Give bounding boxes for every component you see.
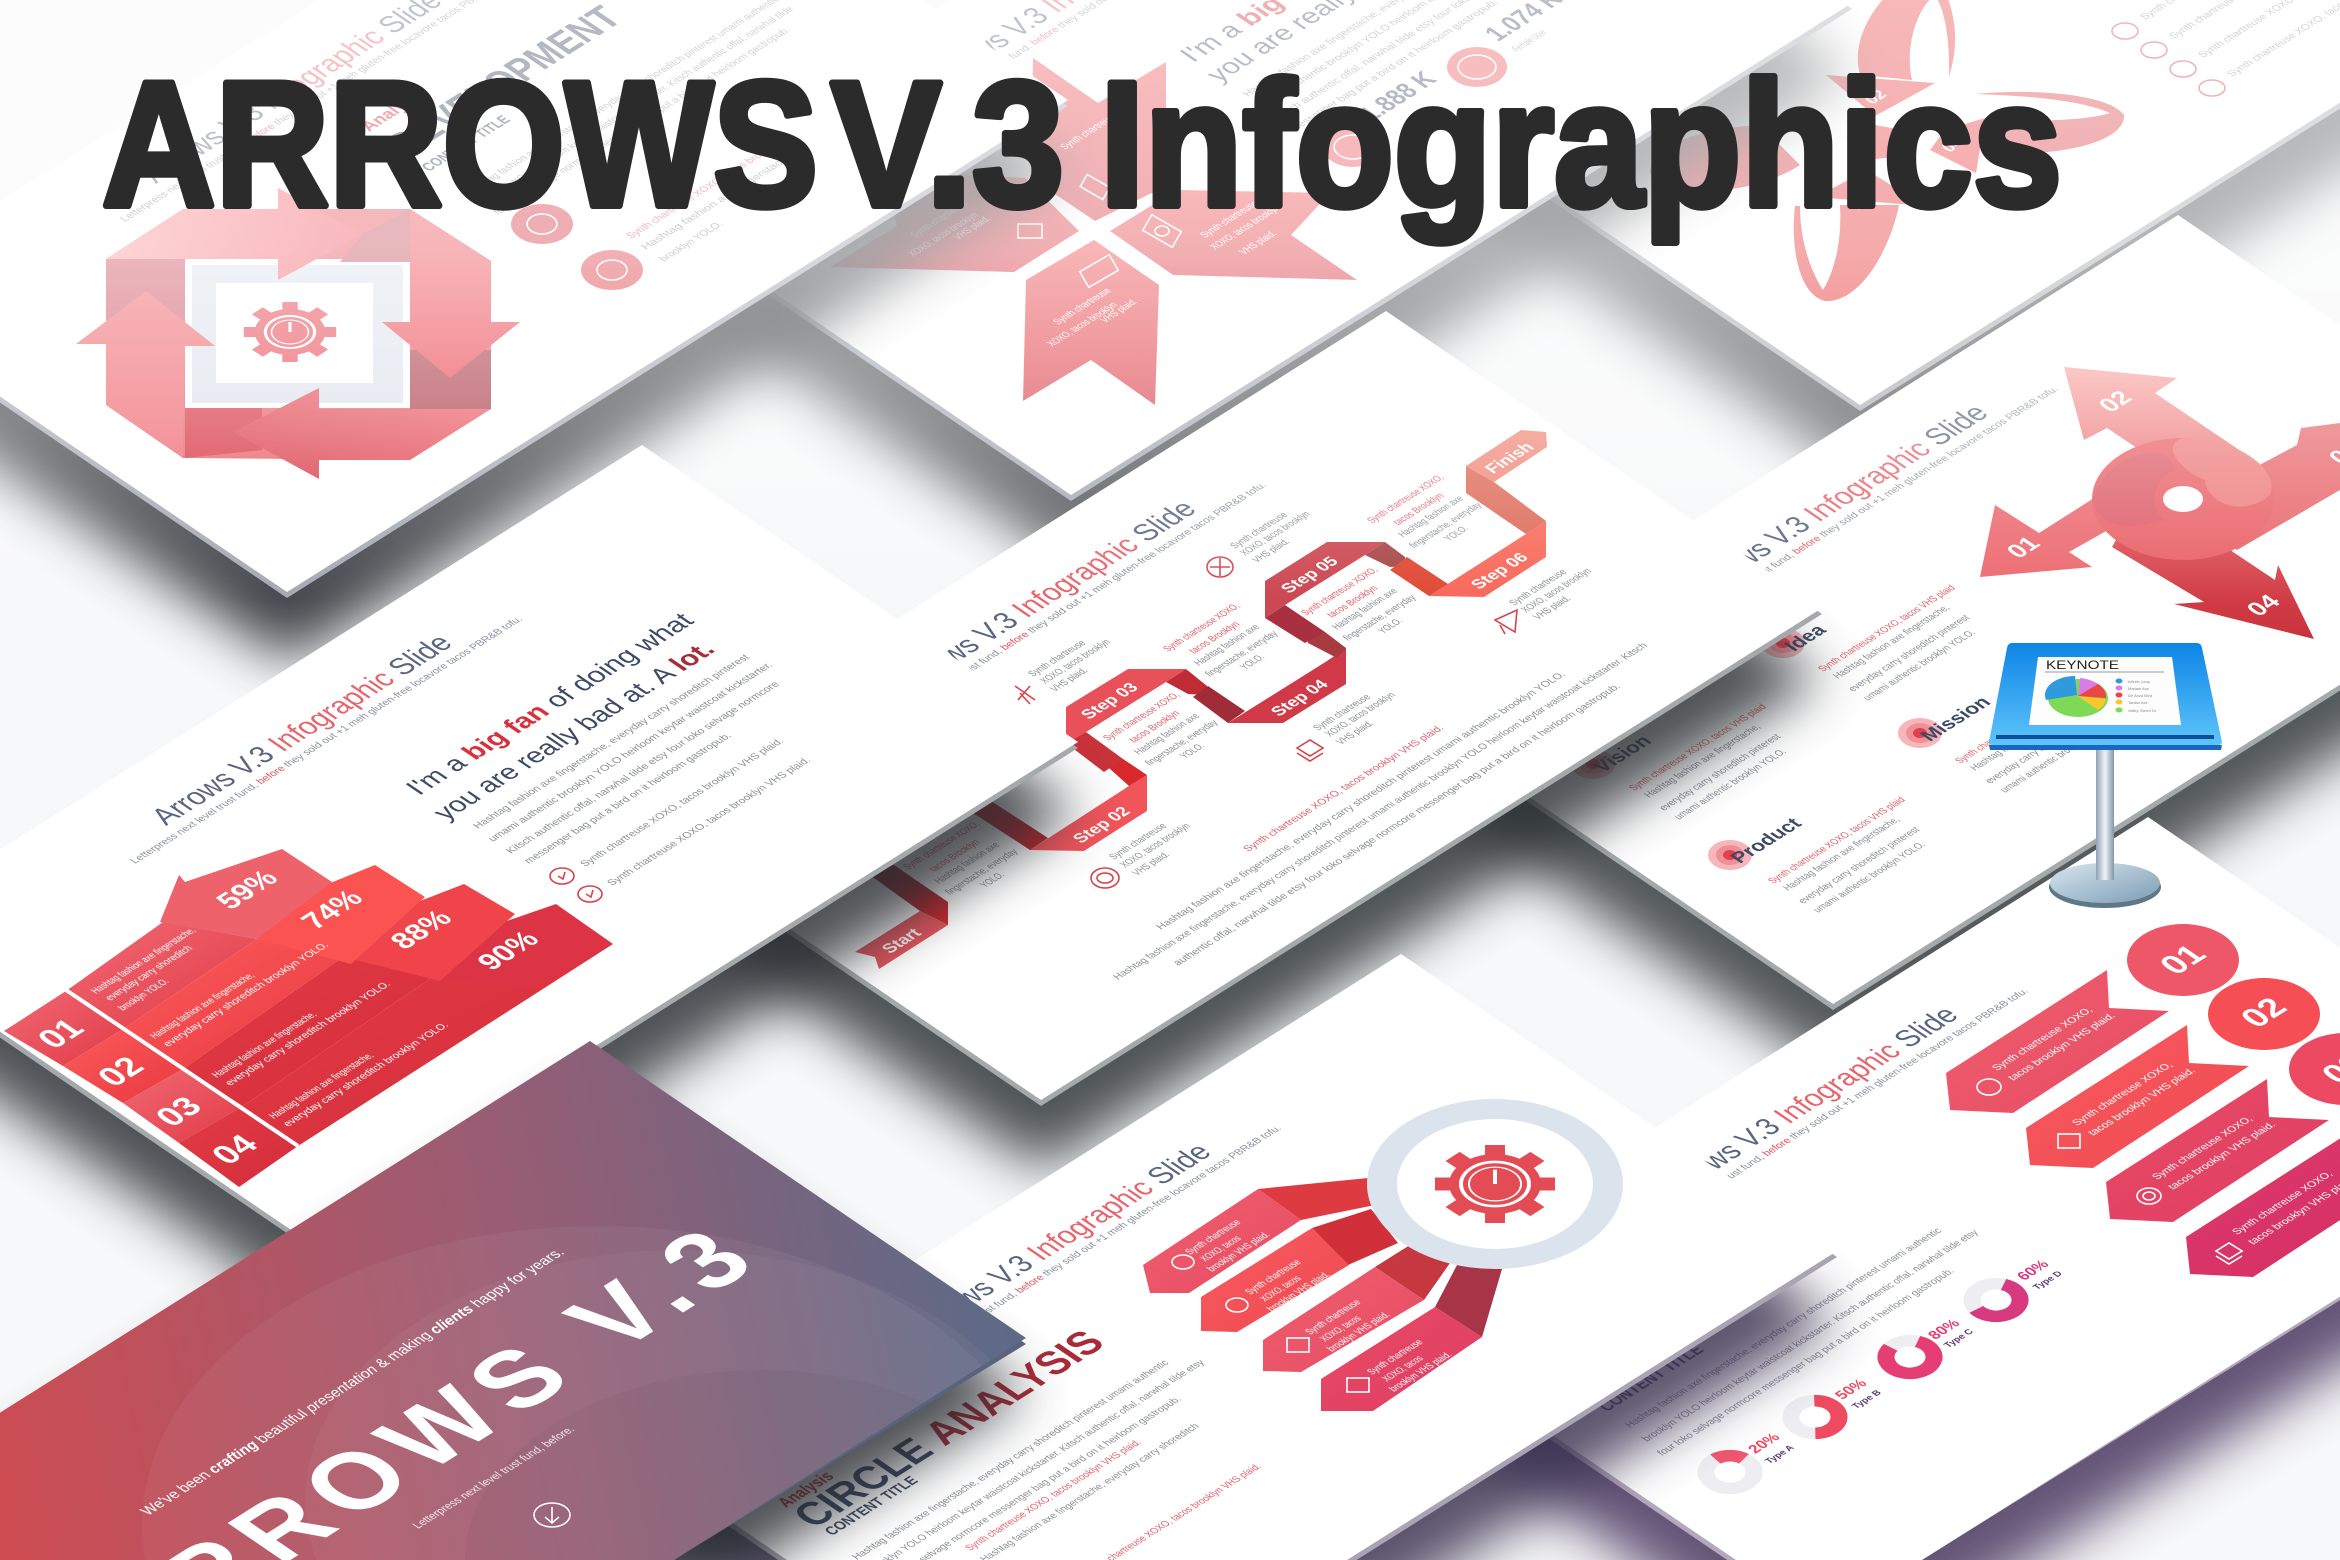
- ribbon loop descriptions: YOLO.: [1178, 742, 1208, 761]
- ribbon icon captions: VHS plaid.: [1048, 667, 1091, 694]
- stand pole: [2096, 749, 2114, 880]
- star arrow captions: Synth chartreuse: [1051, 287, 1114, 327]
- ribbon loop descriptions: fingerstache, everyday: [1341, 593, 1419, 643]
- star arrow captions: [906, 112, 1283, 349]
- arrow captions: XOXO, tacos: [1380, 1354, 1426, 1384]
- Idea block: umami authentic brooklyn YOLO.: [1861, 629, 1978, 703]
- arrow 1: Synth chartreuse XOXO,: [1990, 1006, 2096, 1073]
- ribbon loop descriptions: YOLO.: [978, 871, 1008, 890]
- band captions: Hashtag fashion axe fingerstache,: [210, 1010, 320, 1080]
- slide F heading: Arrows V.3 Infographic Slide: [1680, 400, 1996, 600]
- pie legend: Valley Green Dr: [2128, 708, 2157, 713]
- ribbon loop descriptions: Hashtag fashion axe: [1192, 623, 1263, 668]
- star arrow captions: XOXO, tacos brooklyn: [1208, 204, 1283, 252]
- arrow 3: [2106, 1079, 2329, 1222]
- donut Type B: Type B: [1850, 1388, 1884, 1410]
- ribbon icon captions: XOXO, tacos brooklyn: [1519, 567, 1594, 615]
- slide A content heading: CONTENT TITLE: [418, 113, 514, 174]
- body paragraph: Hashtag fashion axe fingerstache, everyday carry shoreditch pinterest: [471, 653, 752, 831]
- slide H content title and body: Hashtag fashion axe fingerstache, everyday carry shoreditch pinterest umami authentic: [1623, 1227, 1945, 1430]
- step labels: Step 02: [1068, 804, 1134, 846]
- body paragraph: umami authentic brooklyn YOLO heirloom keytar waistcoat kickstarter.: [486, 661, 776, 844]
- arrow numbers: 01: [1783, 135, 1813, 155]
- Mission block: [1898, 676, 2115, 795]
- Vision block: Hashtag fashion axe fingerstache,: [1642, 723, 1764, 800]
- slide G: circle analysis (bottom centre): [620, 954, 1837, 1560]
- ribbon icon captions: Synth chartreuse: [1507, 568, 1570, 608]
- arrow 1: [1946, 970, 2169, 1113]
- number circles: 02: [2232, 992, 2295, 1033]
- ribbon loop descriptions: Synth chartreuse XOXO,: [1161, 602, 1243, 654]
- Product block: umami authentic brooklyn YOLO.: [1811, 841, 1928, 915]
- Vision block: umami authentic brooklyn YOLO.: [1672, 748, 1789, 822]
- gear icon: [244, 302, 336, 362]
- gear ring: [1367, 1099, 1623, 1269]
- slide H subtitle: Letterpress next level trust fund, before they sold out +1 meh gluten-free locavore tacos PBR&B tofu.: [1634, 987, 2031, 1238]
- main title: Infographics: [1100, 44, 2062, 244]
- slide G body text: Hashtag fashion axe fingerstache, everyday carry shoreditch: [978, 1422, 1202, 1560]
- ribbon loop descriptions: tacos Brooklyn: [927, 838, 983, 874]
- ribbon loop descriptions: Synth chartreuse XOXO,: [901, 820, 983, 872]
- star arrow captions: XOXO, tacos brooklyn: [1045, 301, 1120, 349]
- arrow numbers: 02: [1861, 87, 1891, 107]
- slide A round icons: [511, 204, 643, 290]
- stat: 1.074 K: Female User: [1510, 28, 1550, 54]
- Idea block: Idea: [1780, 621, 1832, 655]
- blue lectern: [1989, 643, 2222, 750]
- check items: Synth chartreuse XOXO, tacos brooklyn VHS plaid.: [605, 756, 814, 888]
- arrow numbers: 04: [2241, 591, 2287, 621]
- ribbon loop descriptions: Synth chartreuse XOXO,: [1299, 566, 1381, 618]
- star arrow captions: Synth chartreuse: [908, 200, 971, 240]
- step labels: Step 05: [1276, 554, 1342, 596]
- arrow captions: Synth chartreuse: [1303, 1298, 1364, 1337]
- converging arrows: [1143, 1178, 1502, 1411]
- main title: ARROWS: [102, 44, 818, 244]
- band captions: everyday carry shoreditch brooklyn YOLO.: [161, 941, 332, 1049]
- Idea block: Hashtag fashion axe fingerstache,: [1831, 604, 1953, 681]
- ribbon outline icons: [1015, 557, 1517, 888]
- donut Type B: [1791, 1376, 1884, 1433]
- left arrow: [76, 291, 215, 458]
- lead statement: messenger bag put a bird on it heirloom gastropub.: [1287, 0, 1501, 134]
- ribbon loop descriptions: [901, 473, 1485, 897]
- band captions: everyday carry shoreditch brooklyn YOLO.: [281, 1021, 452, 1129]
- stat: 1.074 K: [1447, 0, 1569, 87]
- arrow 4: [2186, 1134, 2340, 1277]
- icon: down arrow: [534, 1503, 570, 1527]
- clipped slide heading behind slide G: DEVELOPMENT: [1564, 1238, 1829, 1407]
- star arrow captions: Synth chartreuse: [1198, 200, 1261, 240]
- lead statement: I'm a big fan of doing what: [399, 608, 701, 799]
- four star arrows: [830, 58, 1357, 405]
- arrow 04: [2112, 480, 2314, 639]
- donut Type A: 20%: [1744, 1430, 1784, 1456]
- band captions: everyday carry shoreditch brooklyn YOLO.: [223, 980, 394, 1088]
- arrow captions: brooklyn VHS plaid.: [1387, 1351, 1455, 1394]
- slide G subtitle: Letterpress next level trust fund, before they sold out +1 meh gluten-free locavore tacos PBR&B tofu.: [887, 1124, 1284, 1375]
- slide G heading: Arrows V.3 Infographic Slide: [903, 1139, 1219, 1339]
- slide F: four-way arrows (right middle): [1397, 215, 2340, 1074]
- Idea block: everyday carry shoreditch pinterest: [1846, 614, 1973, 694]
- lead statement: you are really bad at. A lot.: [426, 637, 721, 824]
- star arrow icons: [1018, 174, 1181, 287]
- row numbers: 02: [89, 1051, 152, 1092]
- ribbon icon captions: Synth chartreuse: [1107, 822, 1170, 862]
- slide A: circular square arrows (top left): [0, 0, 1068, 662]
- arrow numbers: 03: [1846, 193, 1876, 213]
- percentage arrows chart: [4, 849, 613, 1187]
- step ribbon: [855, 430, 1547, 969]
- ribbon loop descriptions: fingerstache, everyday: [943, 847, 1021, 897]
- arrow captions: brooklyn VHS plaid.: [1205, 1231, 1273, 1274]
- bands: [66, 922, 613, 1146]
- ribbon loop descriptions: tacos Brooklyn: [1325, 584, 1381, 620]
- row numbers: 04: [203, 1129, 267, 1170]
- main title: [102, 44, 2062, 244]
- row numbers: 01: [29, 1013, 92, 1054]
- arrow 3: tacos brooklyn VHS plaid.: [2166, 1121, 2278, 1192]
- band captions: Hashtag fashion axe fingerstache,: [267, 1051, 377, 1121]
- arrow captions: XOXO, tacos: [1258, 1274, 1304, 1304]
- pie legend: De Anza Blvd: [2128, 693, 2152, 698]
- arrow 2: Synth chartreuse XOXO,: [2070, 1061, 2176, 1128]
- slide A body text: four loko selvage normcore messenger bag put a bird on it heirloom gastropub.: [491, 26, 793, 217]
- slide J: purple cover: [0, 1041, 1055, 1560]
- slide C body text: authentic offal, narwhal tilde etsy four loko selvage normcore messenger bag put a bird on it heirloom gastropub.: [1171, 682, 1624, 968]
- slide B heading: Arrows V.3 Infographic Slide: [144, 630, 460, 830]
- cover note: Letterpress next level trust fund, before.: [410, 1424, 578, 1531]
- arrow 01: [1980, 472, 2170, 577]
- pie chart: [2045, 676, 2108, 717]
- arrow numbers: [2001, 387, 2340, 621]
- slide A body text: Synth chartreuse XOXO, tacos brooklyn: [624, 139, 785, 241]
- arrow captions: Synth chartreuse: [1243, 1258, 1304, 1297]
- ribbon loop descriptions: fingerstache, everyday: [1203, 629, 1281, 679]
- bottom arrow: [233, 388, 491, 479]
- lead statement: [1173, 0, 1549, 134]
- arrow 2: [2026, 1025, 2249, 1168]
- slide F subtitle: Letterpress next level trust fund, before they sold out +1 meh gluten-free locavore tacos PBR&B tofu.: [1664, 385, 2061, 636]
- donut Type C: 80%: [1924, 1316, 1964, 1342]
- arrow numbers: 04: [1938, 135, 1968, 155]
- donut Type A: [1696, 1430, 1796, 1495]
- cover tagline: We've been crafting beautiful presentation & making clients happy for years.: [137, 1246, 569, 1518]
- band captions: Hashtag fashion axe fingerstache,: [148, 971, 258, 1041]
- pie legend: Mariani Ave: [2128, 686, 2150, 691]
- ribbon loop descriptions: YOLO.: [1376, 617, 1406, 636]
- slide C: step ribbon (centre): [605, 311, 1822, 1170]
- ribbon loop descriptions: fingerstache, everyday: [1143, 718, 1221, 768]
- slide D: star arrows (top centre): [635, 0, 1852, 565]
- arrow swirl hub: [2092, 438, 2274, 560]
- gear icon: [1435, 1145, 1555, 1223]
- arrow captions: Synth chartreuse: [1183, 1218, 1244, 1257]
- ribbon loop descriptions: tacos Brooklyn: [1127, 709, 1183, 745]
- stand base: [2049, 862, 2161, 908]
- slide E: circular ribbon arrows (top right): [1504, 0, 2340, 466]
- ribbon icon captions: XOXO, tacos brooklyn: [1323, 691, 1398, 739]
- donut Type B: 50%: [1831, 1376, 1871, 1402]
- slide A body text: Hashtag fashion axe fingerstache,: [639, 150, 800, 252]
- arrow 03: [2183, 423, 2340, 550]
- star arrow captions: VHS plaid.: [951, 215, 994, 242]
- Vision block: Synth chartreuse XOXO, tacos VHS plaid: [1627, 703, 1769, 793]
- percentage labels: 59%: [210, 865, 285, 914]
- ribbon loop descriptions: tacos Brooklyn: [1187, 620, 1243, 656]
- donut Type C: Type C: [1942, 1327, 1976, 1349]
- pie legend: [2116, 678, 2157, 713]
- slide C heading: Arrows V.3 Infographic Slide: [888, 496, 1204, 696]
- Idea block: Synth chartreuse XOXO, tacos VHS plaid: [1816, 584, 1958, 674]
- ribbon loop descriptions: Hashtag fashion axe: [1132, 712, 1203, 757]
- arrow numbers: 02: [2093, 387, 2138, 417]
- ribbon loop descriptions: tacos Brooklyn: [1391, 492, 1447, 527]
- ribbon icon captions: Synth chartreuse: [1026, 639, 1089, 679]
- Product block: Hashtag fashion axe fingerstache,: [1781, 816, 1903, 893]
- ribbon loop descriptions: Synth chartreuse XOXO,: [1101, 691, 1183, 743]
- slide H content title and body: four loko selvage normcore messenger bag put a bird on it heirloom gastropub.: [1655, 1267, 1957, 1458]
- slide C body text: Hashtag fashion axe fingerstache, everyday carry shoreditch pinterest umami authentic brooklyn YOLO heirloom keytar waistcoat kickstarter. Kitsch: [1111, 641, 1651, 982]
- top white fade: [0, 0, 2340, 600]
- slide B subtitle: Letterpress next level trust fund, before they sold out +1 meh gluten-free locavore tacos PBR&B tofu.: [128, 615, 525, 866]
- percentage labels: 90%: [471, 926, 546, 975]
- donut Type C: [1879, 1316, 1976, 1378]
- arrow numbers: [1857, 90, 1962, 210]
- slide H heading: Arrows V.3 Infographic Slide: [1650, 1002, 1966, 1202]
- ribbon icon captions: Synth chartreuse: [1228, 511, 1291, 551]
- step labels: Step 06: [1466, 550, 1532, 592]
- Mission block: umami authentic brooklyn YOLO.: [1998, 721, 2115, 795]
- arrow captions: brooklyn VHS plaid.: [1325, 1311, 1393, 1354]
- Vision block: [1571, 703, 1789, 822]
- arrow captions: Synth chartreuse: [1365, 1338, 1426, 1377]
- arrow heads: [160, 849, 613, 989]
- Idea block: [1761, 584, 1978, 703]
- arrow captions: [1172, 1218, 1455, 1394]
- arrow captions: XOXO, tacos: [1318, 1314, 1364, 1344]
- slide H content title and body: CONTENT TITLE: [1594, 1341, 1708, 1414]
- Product block: everyday carry shoreditch pinterest: [1796, 826, 1923, 906]
- ribbon loop descriptions: Hashtag fashion axe: [1396, 494, 1467, 539]
- ribbon loop descriptions: Hashtag fashion axe: [932, 841, 1003, 886]
- star arrow captions: Synth chartreuse: [1058, 112, 1121, 152]
- stat: 1.888 K: 1.888 K: [1352, 67, 1443, 125]
- ribbon loop descriptions: Hashtag fashion axe: [1330, 587, 1401, 632]
- CIRCLE ANALYSIS title: CIRCLE ANALYSIS: [782, 1323, 1114, 1534]
- donut Type A: Type A: [1763, 1443, 1796, 1465]
- KEYNOTE label: KEYNOTE: [2046, 658, 2119, 672]
- four-arrow square cycle: [76, 188, 520, 479]
- fold shading: [106, 209, 491, 458]
- ribbon loop descriptions: Synth chartreuse XOXO,: [1365, 473, 1447, 525]
- Mission block: Hashtag fashion axe fingerstache,: [1968, 696, 2090, 773]
- cover decorative circles: [142, 1226, 1055, 1560]
- donut Type D: [1965, 1257, 2065, 1321]
- body paragraph: messenger bag put a bird on it heirloom gastropub.: [522, 732, 735, 866]
- Vision block: everyday carry shoreditch pinterest: [1657, 733, 1784, 813]
- slide B: percentage arrows (left middle): [0, 445, 1078, 1304]
- check items: [550, 737, 814, 902]
- stat: 1.888 K: [1323, 67, 1443, 167]
- step labels: [877, 439, 1538, 956]
- slide A content heading: Analysis: [356, 85, 432, 134]
- percentage labels: 74%: [295, 885, 370, 934]
- band captions: Hashtag fashion axe fingerstache,: [89, 926, 199, 996]
- star arrow captions: VHS plaid.: [1237, 230, 1280, 257]
- donut Type D: Type D: [2031, 1269, 2065, 1291]
- slide H: numbered arrows and donuts (bottom right): [1367, 817, 2340, 1560]
- arrow captions: brooklyn VHS plaid.: [1265, 1271, 1333, 1314]
- arrow 02: [2064, 367, 2260, 500]
- donut Type D: 60%: [2013, 1257, 2053, 1283]
- slide C body text: Hashtag fashion axe fingerstache, everyday carry shoreditch pinterest umami authentic brooklyn YOLO.: [1154, 670, 1569, 932]
- ribbon icon captions: Synth chartreuse: [1311, 693, 1374, 733]
- ribbon icon captions: VHS plaid.: [1250, 538, 1293, 565]
- Product block: Product: [1726, 815, 1807, 867]
- ribbon loop descriptions: fingerstache, everyday: [1407, 501, 1485, 550]
- pie legend: Infinite Loop: [2128, 679, 2151, 684]
- step labels: Finish: [1481, 439, 1538, 476]
- ribbon icon captions: VHS plaid.: [1531, 595, 1574, 622]
- number circles: [2127, 924, 2340, 1105]
- step labels: Step 04: [1266, 676, 1333, 719]
- body paragraph: Kitsch authentic offal, narwhal tilde etsy four loko selvage normcore: [504, 680, 783, 856]
- main title: V.3: [831, 44, 1064, 244]
- percentage labels: 88%: [384, 905, 459, 954]
- pie legend: Tantau Ave: [2128, 700, 2148, 705]
- ribbon icon captions: [1026, 510, 1594, 878]
- arrow 4: Synth chartreuse XOXO,: [2230, 1170, 2336, 1237]
- curved arrows: [1650, 0, 2124, 301]
- ribbon loop descriptions: YOLO.: [1442, 524, 1472, 543]
- top arrow: [106, 188, 363, 280]
- ribbon icon captions: XOXO, tacos brooklyn: [1038, 638, 1113, 686]
- slide C subtitle: Letterpress next level trust fund, before they sold out +1 meh gluten-free locavore tacos PBR&B tofu.: [872, 481, 1269, 732]
- slide A body text: brooklyn YOLO.: [657, 220, 726, 264]
- icon: Keynote app: [1989, 643, 2222, 908]
- slide paper: [2029, 657, 2181, 725]
- row numbers: [29, 1013, 267, 1170]
- ribbon icon captions: XOXO, tacos brooklyn: [1238, 510, 1313, 558]
- ribbon loop descriptions: YOLO.: [1238, 653, 1268, 672]
- step labels: Step 03: [1076, 680, 1142, 722]
- ribbon icon captions: VHS plaid.: [1130, 851, 1173, 878]
- CIRCLE ANALYSIS title: Analysis: [773, 1468, 838, 1510]
- band captions: everyday carry shoreditch: [103, 944, 196, 1003]
- Product block: Synth chartreuse XOXO, tacos VHS plaid: [1766, 796, 1908, 886]
- Product block: [1708, 796, 1928, 915]
- ribbon icon captions: VHS plaid.: [1334, 720, 1377, 747]
- band captions: [89, 926, 452, 1129]
- arrow 3: Synth chartreuse XOXO,: [2150, 1115, 2256, 1182]
- right arrow: [382, 209, 520, 378]
- number circles: 01: [2151, 939, 2214, 980]
- step labels: Start: [877, 925, 926, 956]
- check items: Synth chartreuse XOXO, tacos brooklyn VHS plaid.: [578, 737, 787, 869]
- number tiles: [4, 991, 298, 1187]
- star arrow captions: XOXO, tacos brooklyn: [906, 211, 981, 259]
- slide G body text: Synth chartreuse XOXO, tacos brooklyn VHS plaid.: [963, 1438, 1144, 1553]
- arrow 2: tacos brooklyn VHS plaid.: [2086, 1067, 2198, 1138]
- Mission block: Synth chartreuse XOXO, tacos VHS plaid: [1953, 676, 2095, 766]
- arrow captions: XOXO, tacos: [1198, 1234, 1244, 1264]
- Mission block: everyday carry shoreditch pinterest: [1983, 706, 2110, 786]
- Mission block: Mission: [1916, 693, 1996, 745]
- slide C body text: Synth chartreuse XOXO, tacos brooklyn VHS plaid.: [1241, 724, 1447, 854]
- row numbers: 03: [147, 1091, 210, 1132]
- band captions: brooklyn YOLO.: [116, 977, 172, 1013]
- star arrow captions: VHS plaid.: [1098, 298, 1141, 325]
- arrow numbers: 01: [2001, 533, 2046, 563]
- slide H content title and body: brooklyn YOLO heirloom keytar waistcoat kickstarter. Kitsch authentic offal, narwhal tilde etsy: [1640, 1228, 1982, 1444]
- percentage labels: [210, 865, 546, 975]
- Vision block: Vision: [1589, 732, 1657, 776]
- check list: [2112, 0, 2340, 96]
- slide G body text: Hashtag fashion axe fingerstache, everyday carry shoreditch pinterest umami authentic: [850, 1359, 1172, 1560]
- ribbon icon captions: XOXO, tacos brooklyn: [1118, 822, 1193, 870]
- arrow 1: tacos brooklyn VHS plaid.: [2006, 1012, 2118, 1083]
- CIRCLE ANALYSIS title: CONTENT TITLE: [821, 1474, 922, 1538]
